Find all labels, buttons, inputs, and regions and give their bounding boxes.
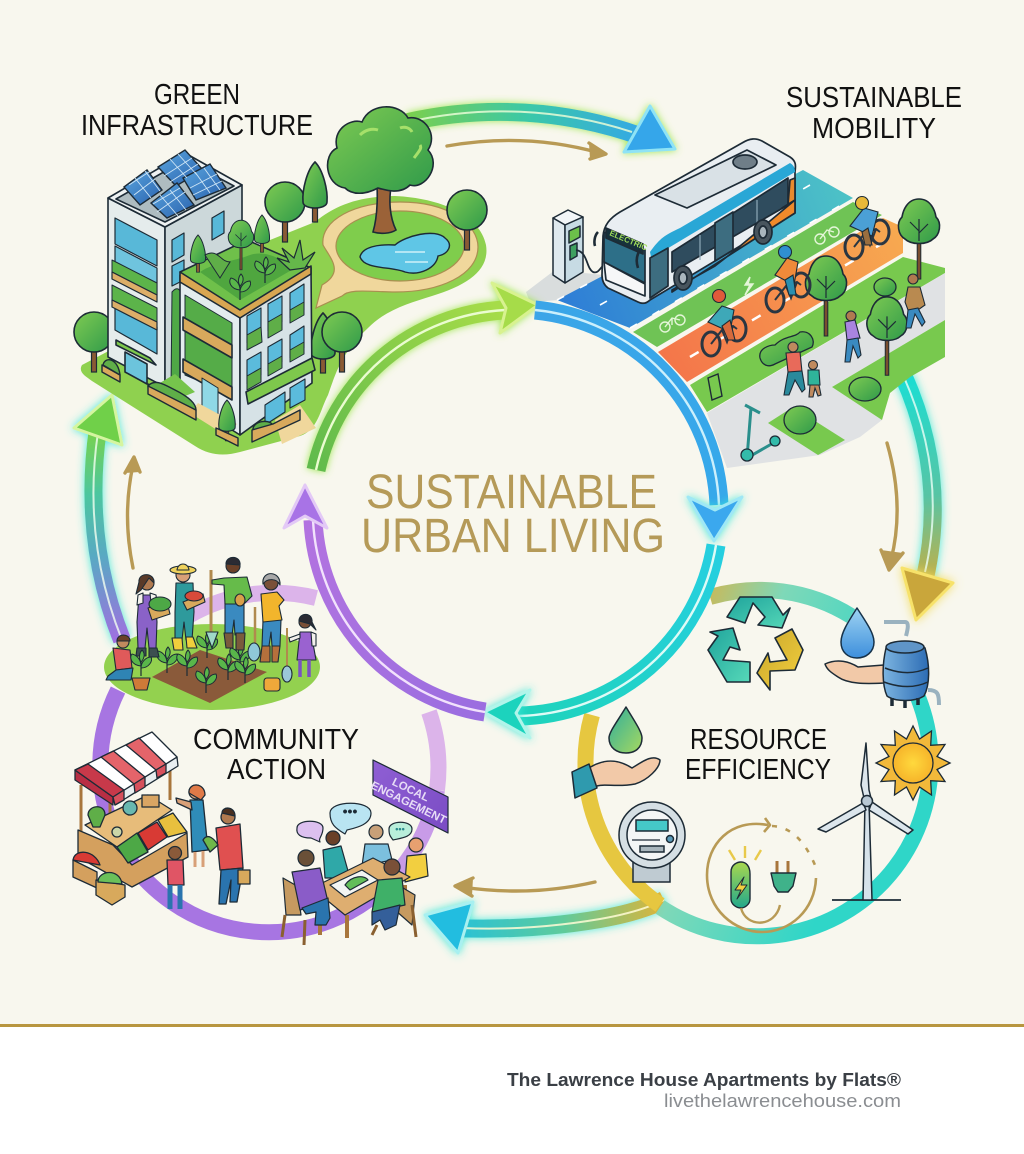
garden lawn bbox=[104, 624, 320, 710]
heading: green infrastructure bbox=[81, 79, 313, 142]
gardener: elder woman with shovel bbox=[248, 574, 284, 662]
community action ring bbox=[100, 593, 438, 932]
market woman bbox=[176, 785, 208, 867]
outer cycle arrowhead: gold bbox=[902, 568, 953, 620]
central ring bbox=[284, 283, 742, 738]
cyclists bbox=[702, 196, 889, 356]
goods on stall bbox=[88, 795, 159, 837]
produce crates bbox=[117, 813, 187, 863]
seedlings bbox=[157, 632, 256, 693]
grey walkway bbox=[707, 273, 945, 468]
soil bed bbox=[152, 650, 267, 703]
speech bubbles bbox=[297, 803, 412, 842]
ring: purple segment bbox=[284, 485, 485, 712]
charging station bbox=[553, 210, 603, 283]
icon: battery and plug in energy loop bbox=[707, 818, 817, 932]
heading: sustainable mobility bbox=[786, 82, 962, 145]
heading: community action: ACTION bbox=[227, 754, 326, 786]
bike rack bbox=[708, 374, 722, 400]
sign: local engagement bbox=[369, 760, 448, 833]
harvest basket bbox=[264, 678, 280, 691]
lane centre dashes bbox=[690, 236, 895, 357]
footer website: livethelawrencehouse.com bbox=[664, 1091, 901, 1111]
central title bbox=[361, 466, 665, 563]
heading: sustainable mobility: MOBILITY bbox=[812, 113, 936, 145]
central title: URBAN LIVING bbox=[361, 510, 665, 563]
bike lane symbols bbox=[660, 227, 839, 332]
outer cycle arrow: green infrastructure to mobility bbox=[408, 106, 675, 152]
icon: hand with green drop bbox=[572, 707, 660, 798]
stall top bbox=[85, 795, 172, 847]
central title: SUSTAINABLE bbox=[366, 466, 657, 519]
icon: recycling symbol bbox=[708, 597, 803, 690]
e-scooter bbox=[741, 405, 780, 461]
icon: smart meter bbox=[619, 802, 685, 882]
awning bbox=[75, 732, 178, 805]
seated people behind table bbox=[323, 825, 428, 882]
speech bubbles: ••• bbox=[395, 824, 405, 834]
footer bbox=[0, 1024, 1024, 1154]
green-roof building bbox=[180, 240, 315, 435]
green bike lane bbox=[633, 202, 882, 347]
icon: sun bbox=[876, 726, 950, 800]
panel: green infrastructure illustration bbox=[74, 107, 487, 454]
small tan arrows bbox=[125, 140, 903, 896]
sign: local engagement: LOCAL bbox=[390, 776, 431, 804]
gardener: woman in straw hat bbox=[170, 564, 205, 650]
tall building bbox=[108, 153, 242, 390]
sign: local engagement: ENGAGEMENT bbox=[369, 780, 448, 827]
electric bus bbox=[594, 139, 795, 303]
street trees bbox=[805, 199, 940, 375]
panel: local engagement meeting illustration bbox=[282, 760, 448, 945]
heading: community action: COMMUNITY bbox=[193, 724, 359, 756]
stall posts bbox=[81, 765, 170, 855]
walkway and pond bbox=[316, 202, 478, 308]
icon: wind turbine bbox=[818, 743, 913, 900]
solar panels bbox=[124, 150, 226, 218]
lower right lawn bbox=[832, 320, 945, 420]
meeting table bbox=[312, 858, 410, 938]
footer brand text: The Lawrence House Apartments by Flats® bbox=[507, 1070, 901, 1090]
panel: sustainable mobility illustration bbox=[526, 139, 945, 468]
panel: community garden illustration bbox=[104, 557, 320, 710]
heading: green infrastructure: INFRASTRUCTURE bbox=[81, 110, 313, 142]
heading: green infrastructure: GREEN bbox=[154, 79, 240, 111]
ground bbox=[81, 196, 486, 454]
outer cycle arrow: community to green infrastructure bbox=[74, 395, 122, 640]
road bbox=[557, 170, 853, 328]
charging pad bbox=[526, 270, 604, 302]
icon: rain barrel bbox=[883, 622, 939, 708]
small lawn bbox=[768, 407, 845, 455]
child bbox=[167, 846, 184, 909]
resource efficiency ring bbox=[585, 590, 931, 936]
rooftop trees bbox=[190, 215, 315, 300]
orange bike lane bbox=[658, 218, 903, 382]
heading: resource efficiency bbox=[685, 724, 831, 786]
road edge lines and dashes bbox=[557, 170, 853, 328]
gardeners bbox=[106, 557, 316, 691]
icon: water drop over open hand bbox=[825, 608, 884, 683]
seated people front bbox=[282, 850, 416, 945]
gardener: woman with greens bbox=[136, 575, 171, 657]
electric bus: ELECTRIC bbox=[608, 229, 649, 253]
pedestrians bbox=[784, 274, 925, 397]
ring: blue segment bbox=[535, 310, 742, 541]
heading: resource efficiency: EFFICIENCY bbox=[685, 754, 831, 786]
ring: teal segment bbox=[484, 545, 716, 738]
bushes bbox=[760, 278, 896, 434]
gardener: man with stake bbox=[206, 557, 252, 650]
crates bbox=[73, 852, 125, 905]
outer cycle arrow: resource efficiency to community bbox=[425, 900, 664, 953]
ring: green segment bbox=[316, 283, 538, 470]
heading: community action bbox=[193, 724, 359, 786]
gardener: girl with spade bbox=[282, 614, 316, 682]
heading: sustainable mobility: SUSTAINABLE bbox=[786, 82, 962, 114]
background trees bbox=[74, 162, 487, 373]
speech bubbles: ••• bbox=[343, 803, 357, 819]
planters and paths bbox=[102, 360, 316, 446]
green strip bbox=[690, 257, 945, 412]
outer cycle arrow: mobility to resource efficiency bbox=[903, 375, 933, 578]
gardener: kneeling boy bbox=[106, 635, 152, 690]
panel: farmers market illustration bbox=[73, 732, 250, 909]
panel: resource efficiency icons bbox=[572, 597, 950, 932]
big tree bbox=[328, 107, 433, 233]
heading: resource efficiency: RESOURCE bbox=[690, 724, 827, 756]
market man bbox=[203, 808, 250, 904]
stall body bbox=[78, 830, 188, 887]
